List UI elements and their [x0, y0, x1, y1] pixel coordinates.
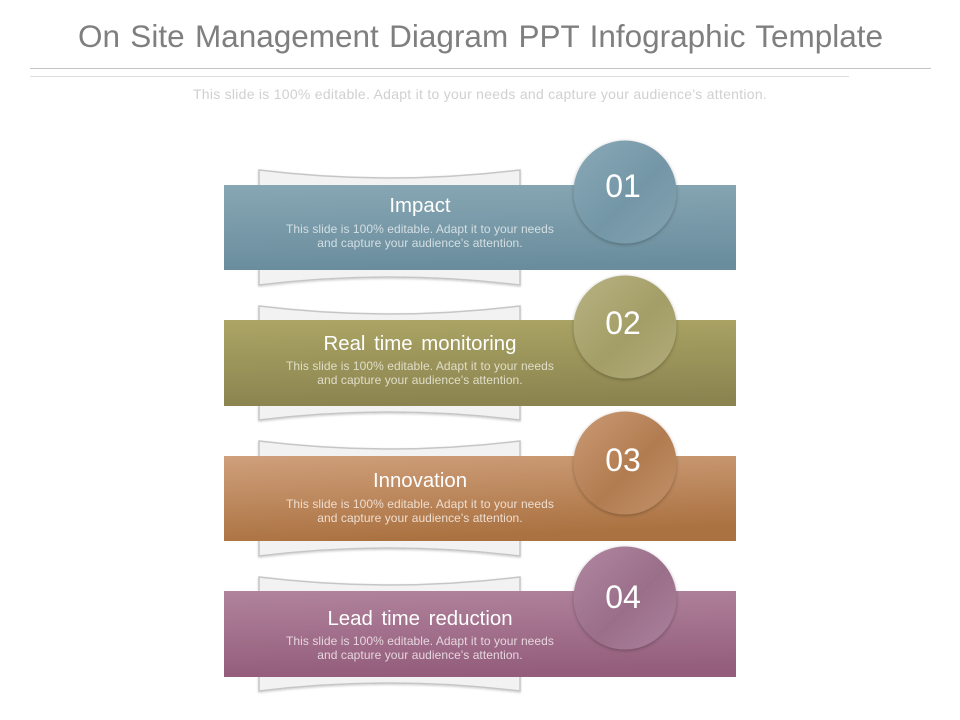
row 1 description — [286, 222, 554, 250]
row 3 description: and capture your audience's attention. — [317, 511, 523, 525]
row 4: ribbon backing — [259, 577, 520, 691]
row 2: number circle — [574, 276, 676, 378]
row 3 heading: Innovation — [373, 470, 467, 492]
row 4 description: This slide is 100% editable. Adapt it to your needs — [286, 634, 554, 648]
row 2 description — [286, 359, 554, 387]
row 4 heading: Lead time reduction — [327, 608, 513, 630]
row 2 description: This slide is 100% editable. Adapt it to your needs — [286, 359, 554, 373]
row 2: band — [224, 320, 736, 406]
row 2: ribbon backing — [259, 306, 520, 420]
row 1 number: 01 — [605, 168, 641, 204]
row 4 description — [286, 634, 554, 662]
row 4: number circle — [574, 546, 676, 650]
row 3: ribbon backing — [259, 441, 520, 556]
row 4 description: and capture your audience's attention. — [317, 648, 523, 662]
row 1 description: This slide is 100% editable. Adapt it to your needs — [286, 222, 554, 236]
row 2 description: and capture your audience's attention. — [317, 373, 523, 387]
row 3: band — [224, 456, 736, 541]
row 1: band — [224, 185, 736, 270]
row 1 heading: Impact — [389, 195, 451, 217]
row 4: band — [224, 591, 736, 677]
row 1 description: and capture your audience's attention. — [317, 236, 523, 250]
title: On Site Management Diagram PPT Infographic Template — [78, 18, 883, 54]
row 3 description: This slide is 100% editable. Adapt it to your needs — [286, 497, 554, 511]
row 3 description — [286, 497, 554, 525]
row 3 number: 03 — [605, 442, 641, 478]
row 2 heading: Real time monitoring — [324, 333, 516, 355]
row 1: number circle — [574, 140, 676, 244]
row 1: ribbon backing — [259, 170, 520, 285]
row 4 number: 04 — [605, 579, 641, 615]
row 3: number circle — [574, 412, 676, 514]
row 2 number: 02 — [605, 305, 641, 341]
subtitle: This slide is 100% editable. Adapt it to your needs and capture your audience's attention. — [193, 86, 767, 102]
